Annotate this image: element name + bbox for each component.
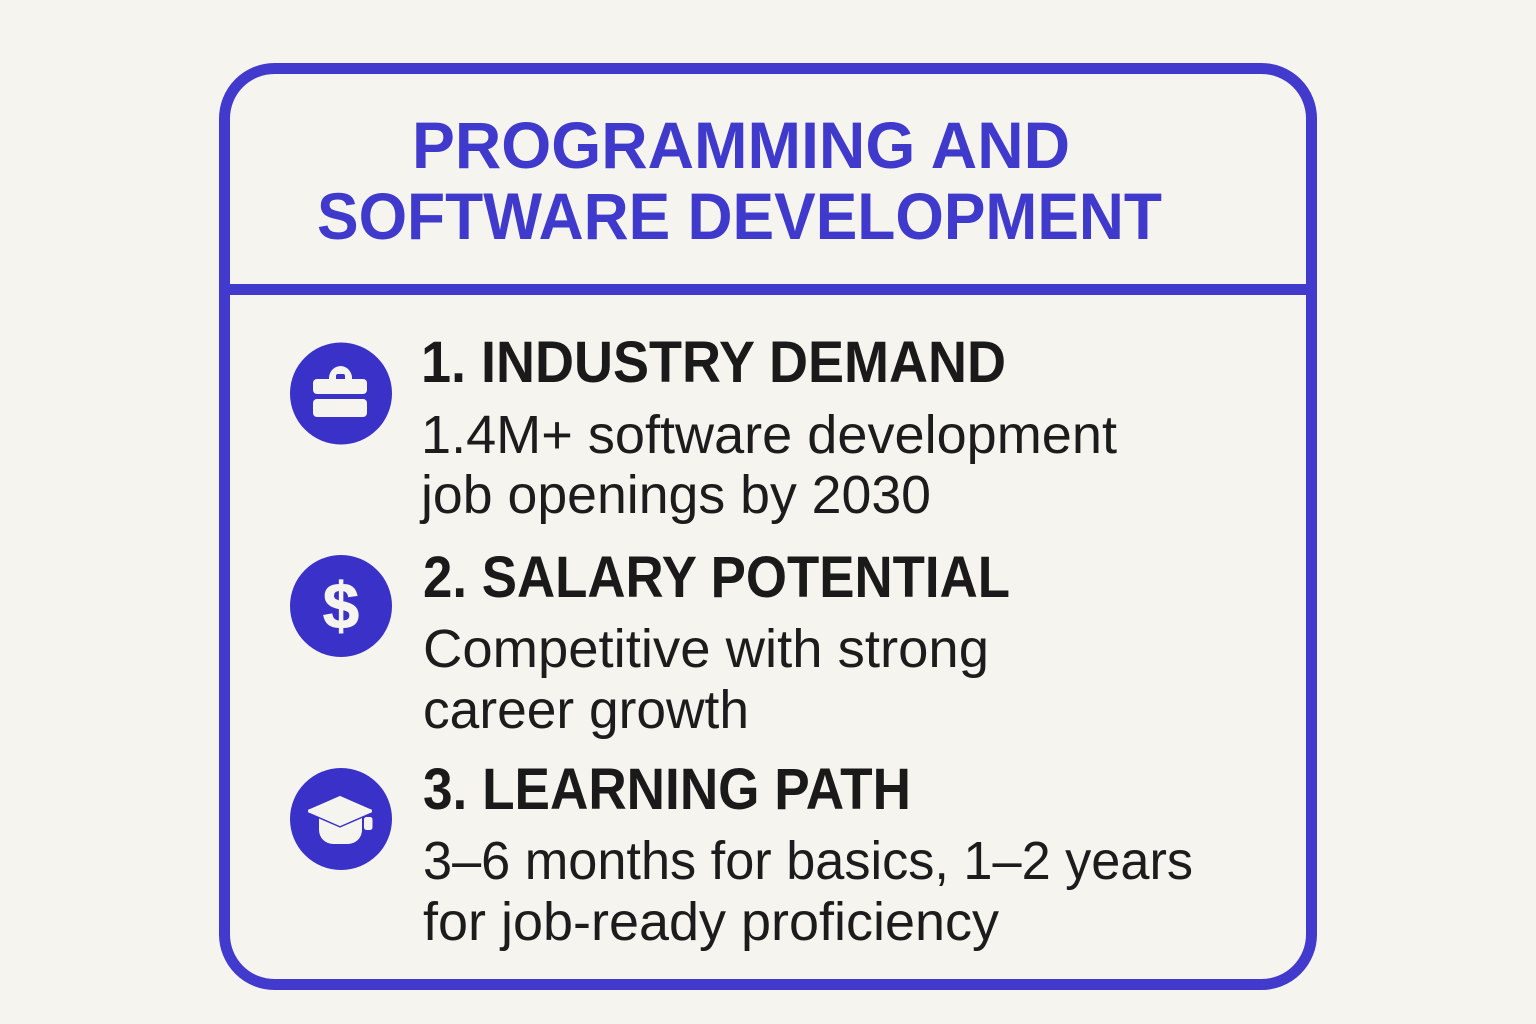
icon: dollar: $ xyxy=(323,569,359,642)
heading: salary potential: 2. SALARY POTENTIAL xyxy=(423,545,1010,610)
panel: main card xyxy=(224,68,1312,984)
title xyxy=(317,108,1162,253)
icon: briefcase xyxy=(290,342,392,444)
text: learning path detail: 3–6 months for basics, 1–2 years xyxy=(423,831,1193,891)
text: salary potential detail: career growth xyxy=(423,680,749,740)
icon: graduation cap xyxy=(290,768,392,870)
title: SOFTWARE DEVELOPMENT xyxy=(317,179,1162,253)
heading: learning path: 3. LEARNING PATH xyxy=(423,757,911,822)
text: salary potential detail xyxy=(423,619,989,740)
title: PROGRAMMING AND xyxy=(412,108,1070,182)
text: industry demand detail: 1.4M+ software development xyxy=(421,405,1117,465)
text: industry demand detail xyxy=(419,405,1117,525)
heading: industry demand: 1. INDUSTRY DEMAND xyxy=(421,330,1006,395)
text: learning path detail xyxy=(423,831,1193,952)
icon: dollar xyxy=(290,555,392,657)
text: salary potential detail: Competitive with strong xyxy=(423,619,989,679)
text: learning path detail: for job-ready proficiency xyxy=(423,892,999,952)
text: industry demand detail: job openings by 2030 xyxy=(419,465,931,525)
